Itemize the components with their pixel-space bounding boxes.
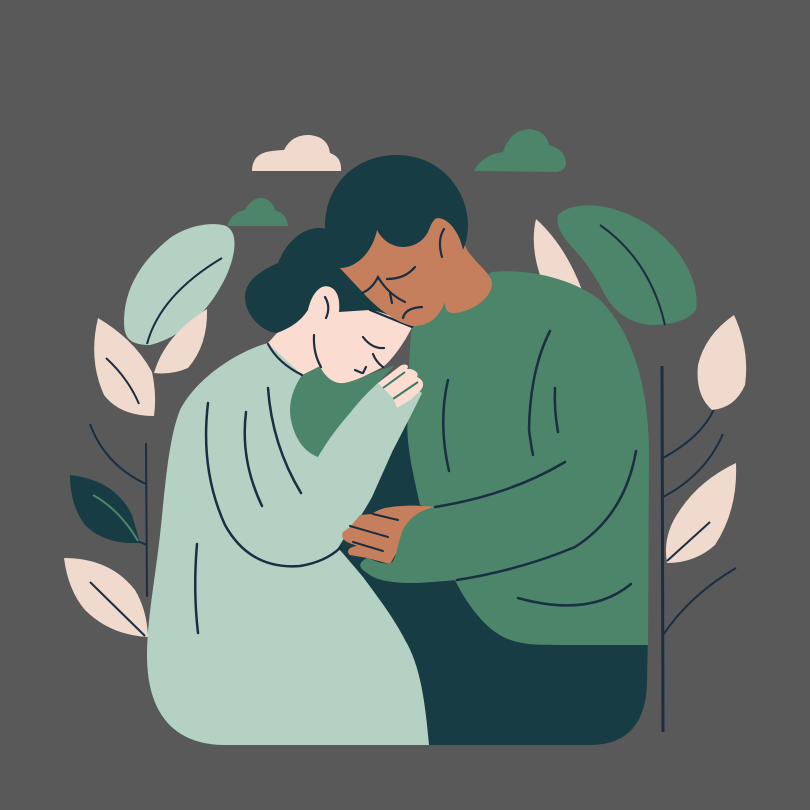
man: hair xyxy=(325,155,468,268)
woman: hair bun xyxy=(245,228,412,333)
leaf: peach left xyxy=(94,318,155,416)
woman: sleeve cuff xyxy=(340,383,422,450)
cloud: green top right xyxy=(474,129,566,172)
leaf: large green upper right xyxy=(558,205,697,325)
leaf: peach behind man xyxy=(534,219,582,290)
man: face lines xyxy=(362,229,444,318)
plant stems: left xyxy=(90,424,147,597)
man: dark trousers xyxy=(330,410,648,745)
man: neck and face xyxy=(338,210,492,326)
dress fold lines xyxy=(195,388,340,633)
woman: face and neck xyxy=(268,286,412,383)
cloud: green small xyxy=(227,198,288,226)
woman: mint dress xyxy=(147,343,429,745)
woman: hand xyxy=(378,365,423,409)
woman: inner green sleeve xyxy=(290,365,395,457)
cloud: peach top xyxy=(252,135,341,171)
leaf: peach right middle xyxy=(666,463,736,563)
leaf: peach right top xyxy=(698,315,746,410)
leaf: dark teal left xyxy=(70,475,140,543)
man: green sweater arm xyxy=(360,451,636,583)
leaf: peach lower left xyxy=(64,558,148,637)
man: hand on arm xyxy=(342,506,435,564)
leaf: large mint upper left xyxy=(124,224,234,345)
sweater fold lines xyxy=(443,331,631,605)
leaf: peach small upper left xyxy=(154,309,207,373)
plant stems: right xyxy=(662,366,736,732)
man: green sweater torso xyxy=(407,271,649,645)
